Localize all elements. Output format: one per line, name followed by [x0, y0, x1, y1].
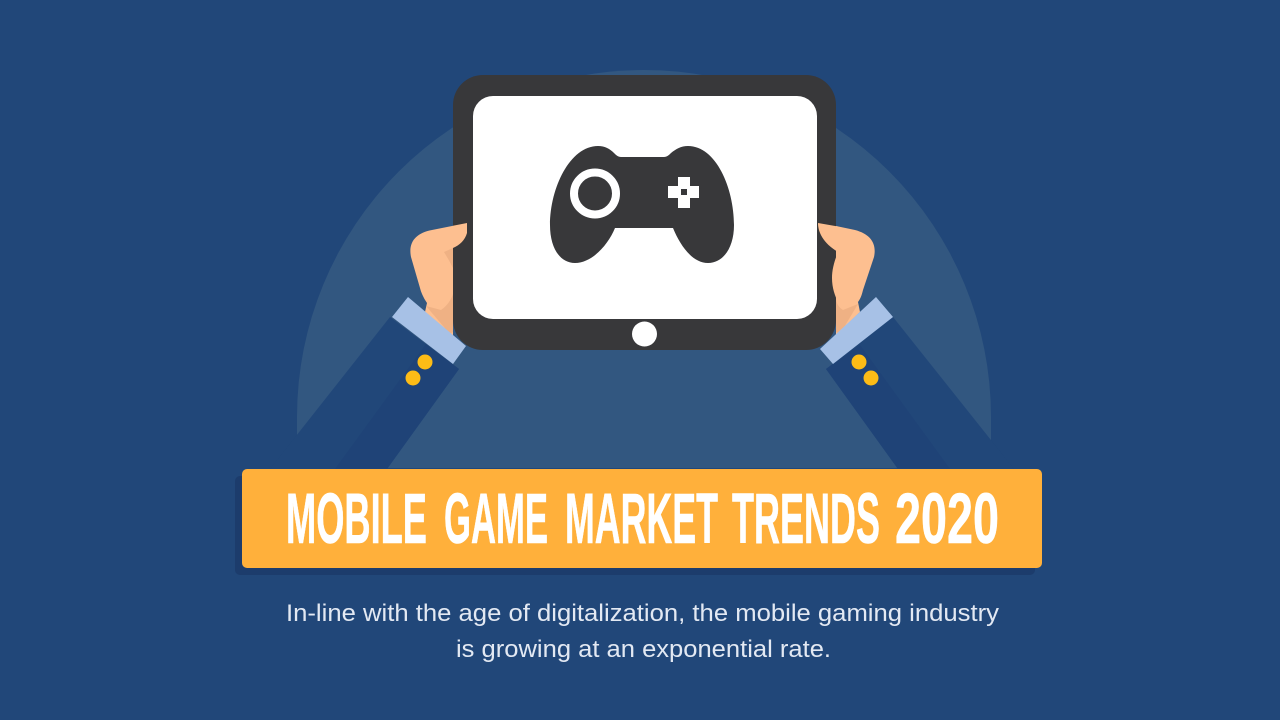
- left hand: [410, 223, 467, 340]
- right sleeve buttons: [852, 354, 878, 386]
- tablet: [453, 75, 836, 350]
- left thumb: [453, 223, 467, 248]
- intro text: [286, 600, 999, 663]
- title: TRENDS: [732, 480, 880, 559]
- intro text: is growing at an exponential rate.: [456, 636, 831, 663]
- title: GAME: [444, 480, 548, 559]
- backdrop circle: [297, 70, 991, 468]
- title: [286, 480, 999, 559]
- illustration: left arm: [270, 223, 467, 469]
- intro text: In-line with the age of digitalization, the mobile gaming industry: [286, 600, 999, 627]
- tablet screen: [473, 96, 817, 319]
- banner panel: [242, 469, 1042, 568]
- right sleeve: [826, 317, 1014, 469]
- title: 2020: [895, 480, 999, 559]
- right cuff: [820, 297, 893, 364]
- right hand: [836, 226, 875, 335]
- left sleeve buttons: [406, 354, 432, 386]
- banner shadow: [235, 476, 1035, 575]
- tablet body: [453, 75, 836, 350]
- controller d-pad: [668, 177, 699, 208]
- title banner: [235, 469, 1042, 575]
- icon: game controller: [550, 146, 734, 263]
- title: MOBILE: [286, 480, 427, 559]
- tablet home button: [632, 322, 657, 346]
- controller joystick ring: [574, 172, 616, 214]
- title: MARKET: [565, 480, 718, 559]
- illustration: right arm: [820, 226, 1014, 469]
- left sleeve: [270, 317, 459, 469]
- left cuff: [392, 297, 466, 364]
- right thumb and palm edge: [818, 223, 838, 302]
